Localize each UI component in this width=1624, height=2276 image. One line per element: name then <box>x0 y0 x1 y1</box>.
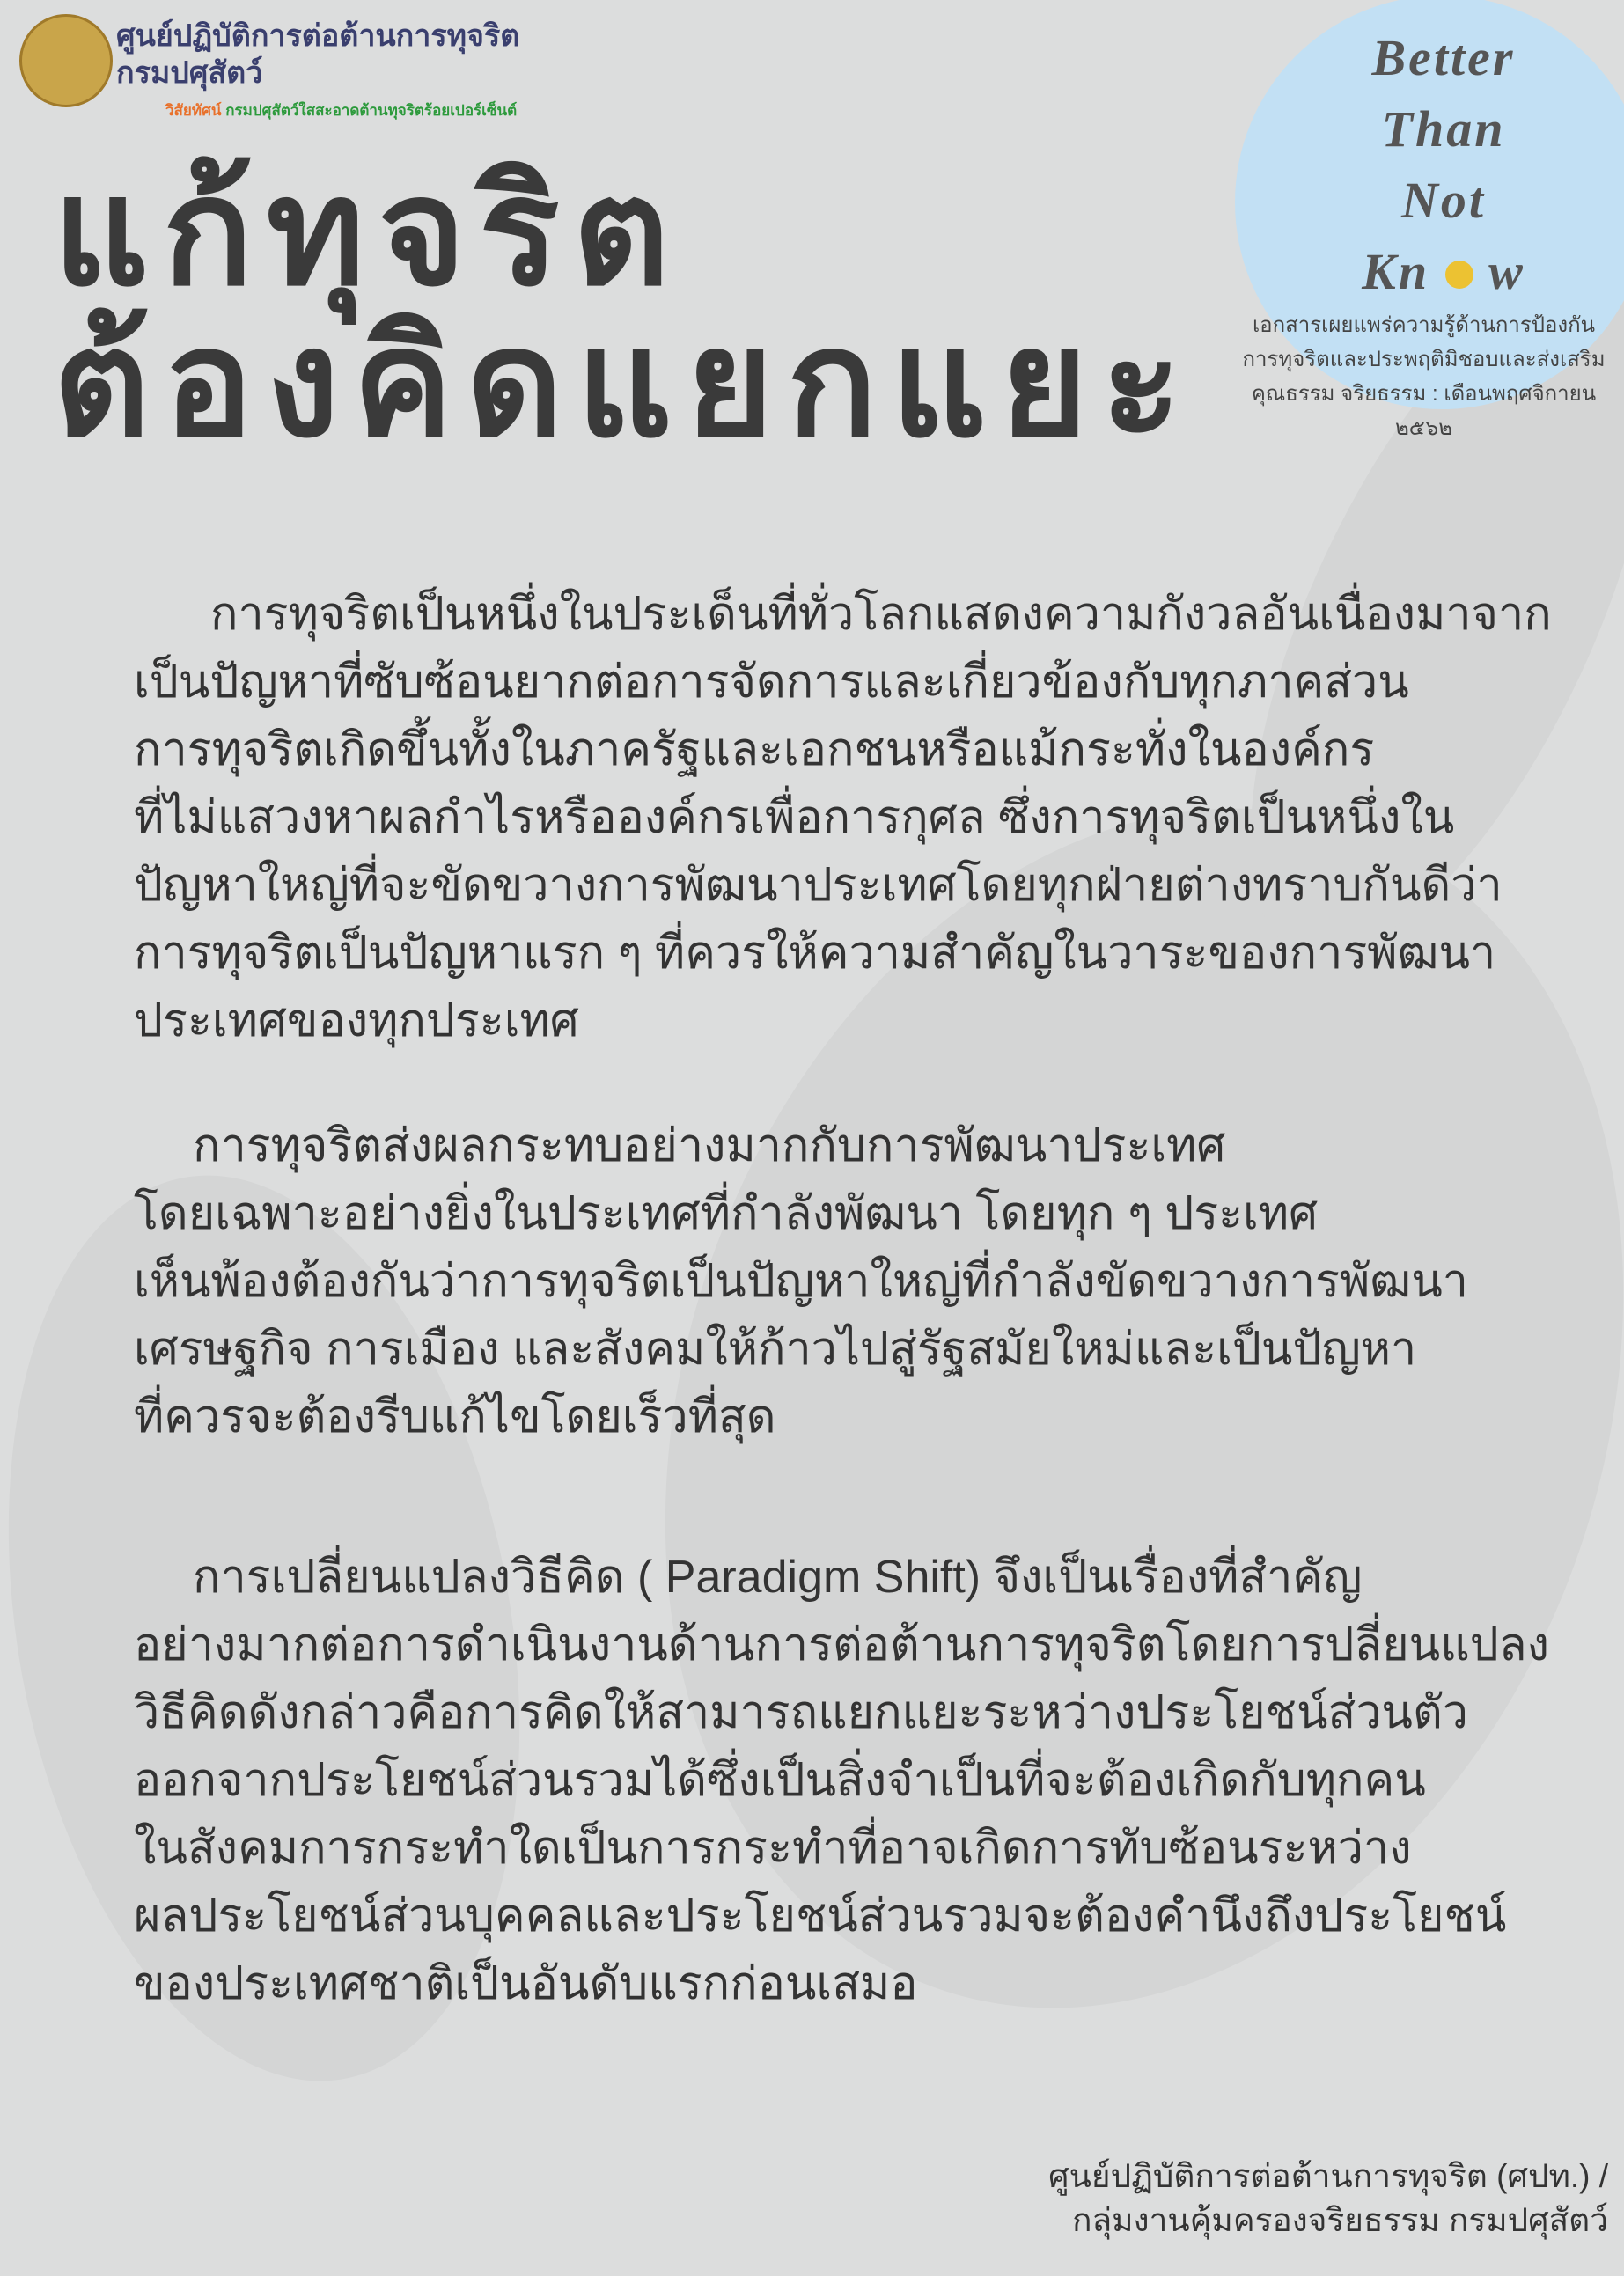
header logo <box>19 14 519 120</box>
paragraph 1: การทุจริตเกิดขึ้นทั้งในภาครัฐและเอกชนหรือแม้กระทั่งในองค์กร <box>134 724 1374 775</box>
paragraph 3: ผลประโยชน์ส่วนบุคคลและประโยชน์ส่วนรวมจะต้องคำนึงถึงประโยชน์ <box>134 1891 1506 1942</box>
paragraph 2: เห็นพ้องต้องกันว่าการทุจริตเป็นปัญหาใหญ่ที่กำลังขัดขวางการพัฒนา <box>134 1256 1468 1307</box>
paragraph 2 <box>134 1120 1468 1443</box>
paragraph 1: ประเทศของทุกประเทศ <box>134 995 579 1046</box>
paragraph 1 <box>134 583 1552 1047</box>
subtitle: ๒๕๖๒ <box>1395 416 1452 440</box>
paragraph 3: วิธีคิดดังกล่าวคือการคิดให้สามารถแยกแยะระหว่างประโยชน์ส่วนตัว <box>134 1687 1468 1738</box>
header logo: วิสัยทัศน์ กรมปศุสัตว์ใสสะอาดต้านทุจริตร้อยเปอร์เซ็นต์ <box>165 102 517 119</box>
paragraph 3 <box>134 1545 1549 2009</box>
paragraph 2: การทุจริตส่งผลกระทบอย่างมากกับการพัฒนาประเทศ <box>193 1120 1225 1171</box>
subtitle: การทุจริตและประพฤติมิชอบและส่งเสริม <box>1242 348 1606 371</box>
badge text: Better <box>1371 29 1515 86</box>
logo text: ศูนย์ปฏิบัติการต่อต้านการทุจริต <box>116 19 519 53</box>
badge text: Not <box>1401 172 1486 229</box>
footer credit: กลุ่มงานคุ้มครองจริยธรรม กรมปศุสัตว์ <box>1072 2202 1608 2238</box>
footer credit: ศูนย์ปฏิบัติการต่อต้านการทุจริต (ศปท.) / <box>1048 2158 1608 2194</box>
badge text <box>1361 29 1525 300</box>
paragraph 2: โดยเฉพาะอย่างยิ่งในประเทศที่กำลังพัฒนา โดยทุก ๆ ประเทศ <box>134 1188 1318 1239</box>
subtitle: คุณธรรม จริยธรรม : เดือนพฤศจิกายน <box>1252 382 1596 406</box>
badge text: Than <box>1382 100 1505 158</box>
paragraph 1: การทุจริตเป็นปัญหาแรก ๆ ที่ควรให้ความสำคัญในวาระของการพัฒนา <box>134 928 1495 979</box>
badge text: Kn w <box>1362 243 1525 300</box>
title <box>53 149 1194 467</box>
paragraph 1: ปัญหาใหญ่ที่จะขัดขวางการพัฒนาประเทศโดยทุกฝ่ายต่างทราบกันดีว่า <box>134 860 1503 911</box>
paragraph 3: ของประเทศชาติเป็นอันดับแรกก่อนเสมอ <box>134 1958 917 2009</box>
subtitle: เอกสารเผยแพร่ความรู้ด้านการป้องกัน <box>1253 313 1595 337</box>
paragraph 1: การทุจริตเป็นหนึ่งในประเด็นที่ทั่วโลกแสดงความกังวลอันเนื่องมาจาก <box>210 589 1552 640</box>
paragraph 1: เป็นปัญหาที่ซับซ้อนยากต่อการจัดการและเกี่ยวข้องกับทุกภาคส่วน <box>134 657 1409 708</box>
footer credit <box>1048 2158 1608 2240</box>
paragraph 2: เศรษฐกิจ การเมือง และสังคมให้ก้าวไปสู่รัฐสมัยใหม่และเป็นปัญหา <box>134 1324 1416 1375</box>
logo text: กรมปศุสัตว์ <box>116 56 262 90</box>
logo text <box>116 19 519 92</box>
circle badge <box>1235 0 1624 409</box>
title: ต้องคิดแยกแยะ <box>53 300 1194 467</box>
paragraph 2: ที่ควรจะต้องรีบแก้ไขโดยเร็วที่สุด <box>134 1391 775 1443</box>
subtitle <box>1242 313 1606 440</box>
paragraph 1: ที่ไม่แสวงหาผลกำไรหรือองค์กรเพื่อการกุศล ซึ่งการทุจริตเป็นหนึ่งใน <box>134 792 1454 843</box>
paragraph 3: ในสังคมการกระทำใดเป็นการกระทำที่อาจเกิดการทับซ้อนระหว่าง <box>134 1823 1412 1874</box>
icon: department seal <box>19 14 113 107</box>
paragraph 3: การเปลี่ยนแปลงวิธีคิด ( Paradigm Shift) จึงเป็นเรื่องที่สำคัญ <box>193 1552 1362 1603</box>
paragraph 3: ออกจากประโยชน์ส่วนรวมได้ซึ่งเป็นสิ่งจำเป็นที่จะต้องเกิดกับทุกคน <box>134 1755 1426 1806</box>
paragraph 3: อย่างมากต่อการดำเนินงานด้านการต่อต้านการทุจริตโดยการปลี่ยนแปลง <box>134 1619 1549 1670</box>
title: แก้ทุจริต <box>53 149 683 316</box>
